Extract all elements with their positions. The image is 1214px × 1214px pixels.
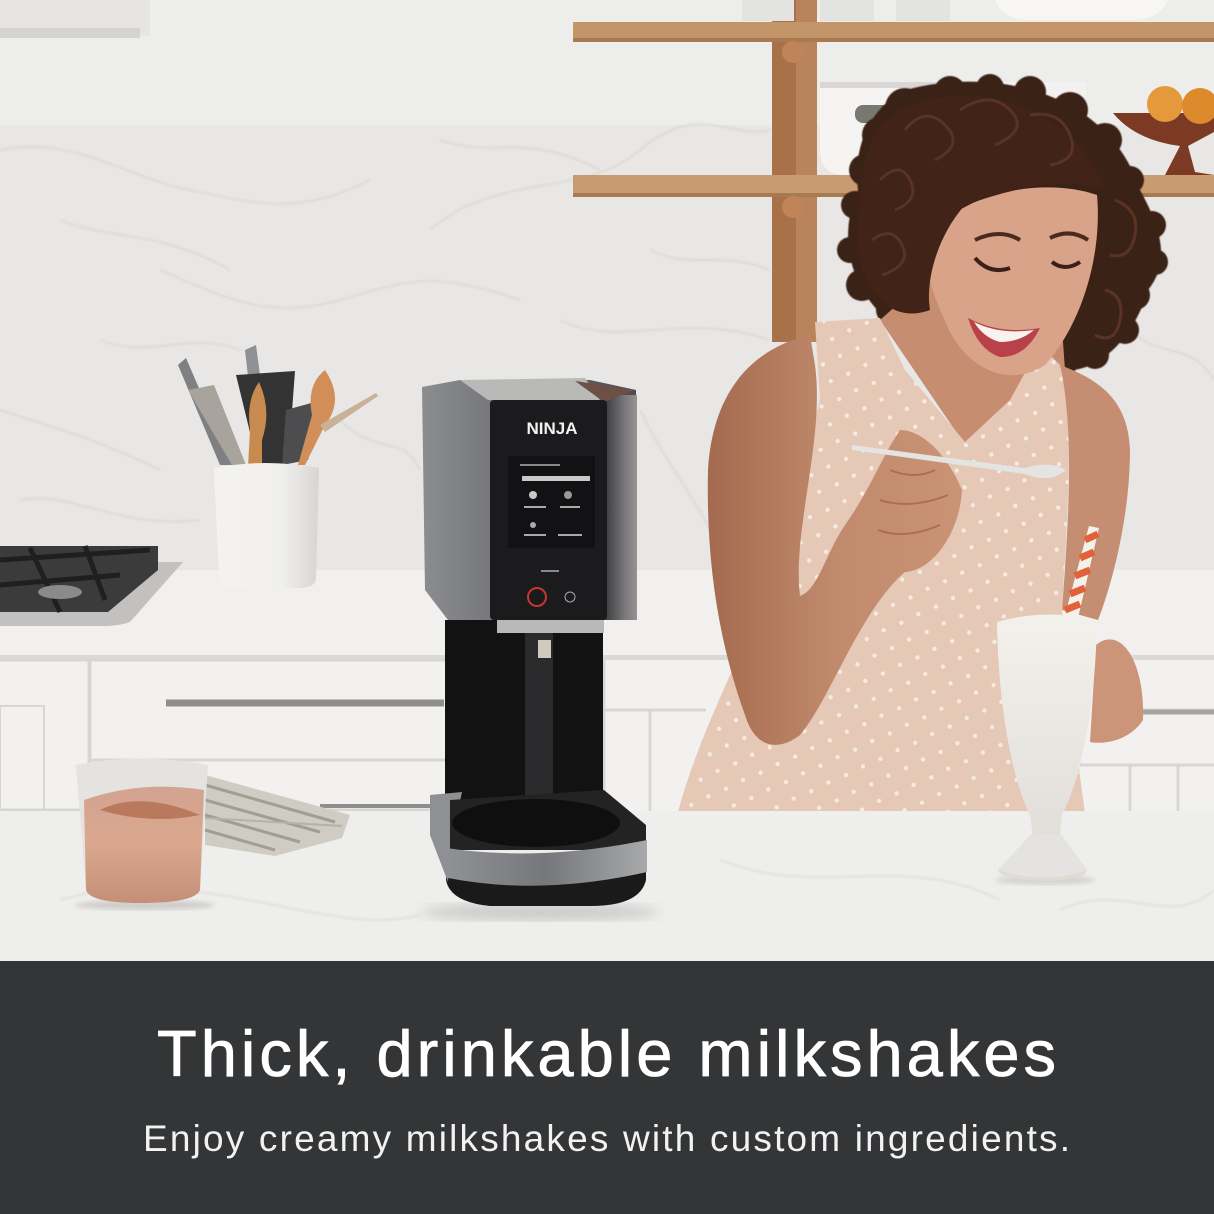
black body: [445, 620, 603, 810]
wooden shelves: [573, 0, 1214, 342]
neck and chest: [880, 280, 1065, 470]
machine base: [430, 790, 647, 906]
kitchen background: [0, 0, 1214, 815]
head unit: [422, 380, 636, 620]
cabinets: [0, 660, 1214, 812]
power button: [528, 588, 546, 606]
left arm: [708, 335, 962, 745]
gas stove: [0, 546, 183, 626]
display panel: [508, 456, 595, 572]
blouse: [678, 318, 1085, 812]
face: [925, 187, 1098, 375]
logo: NINJA: [526, 419, 578, 438]
right hand: [1090, 639, 1143, 743]
shelf items: [742, 0, 1214, 175]
spoon: [852, 445, 1066, 478]
towel: [205, 775, 350, 856]
woman: [678, 74, 1168, 812]
hair front: [858, 96, 1105, 314]
utensil holder: [178, 345, 378, 588]
range hood: [0, 0, 150, 38]
front counter: [0, 811, 1214, 961]
right shoulder: [1060, 365, 1130, 620]
subheading: Enjoy creamy milkshakes with custom ingredients.: [143, 1118, 1070, 1159]
headline: Thick, drinkable milkshakes: [157, 1017, 1056, 1090]
hair back: [837, 74, 1168, 374]
milkshake glass: [997, 526, 1099, 881]
caption band: [0, 961, 1214, 1214]
ingredient tub: [76, 758, 208, 903]
hair curl highlights: [872, 100, 1136, 338]
blender: Ninja machine: [422, 378, 647, 906]
